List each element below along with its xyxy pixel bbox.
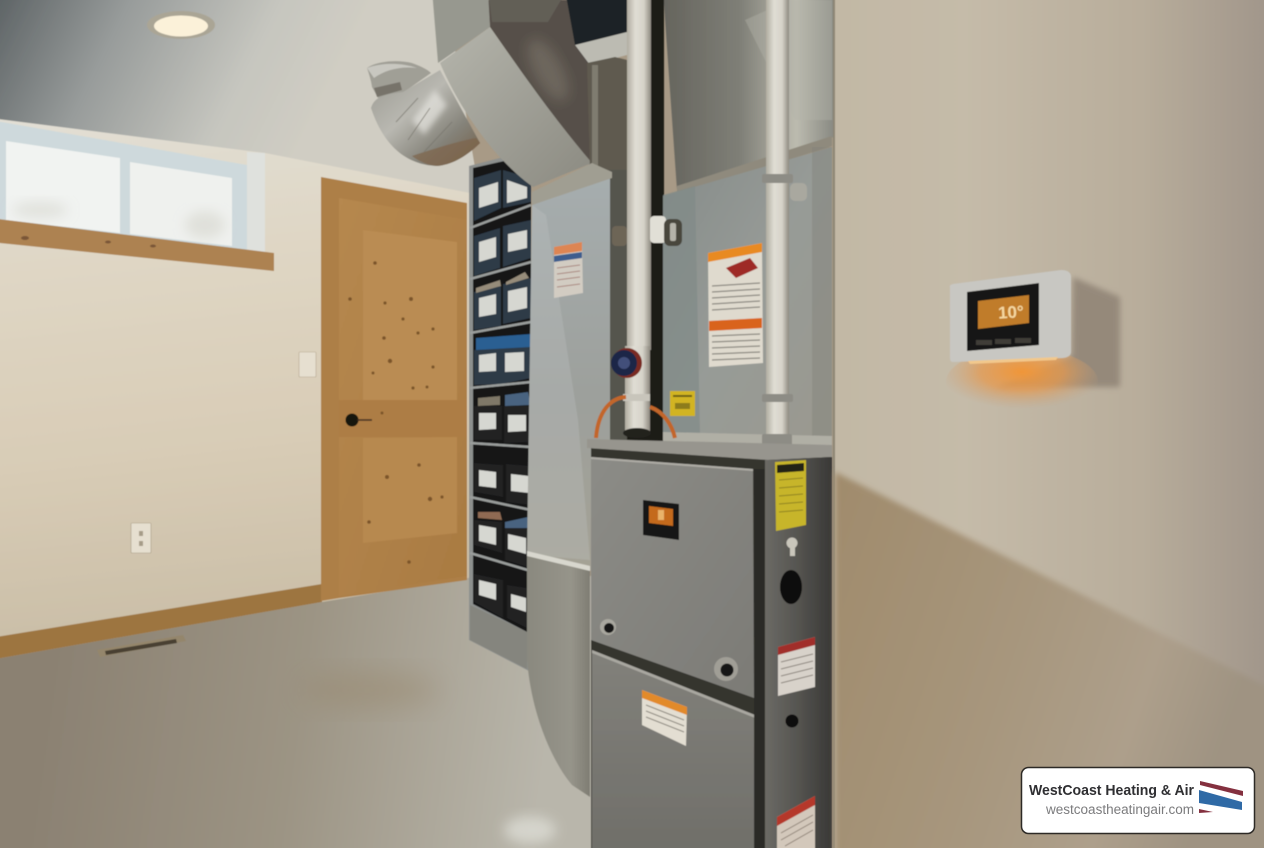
large ductwork plenum (432, 0, 834, 196)
bins (474, 170, 531, 628)
large side hole (780, 570, 802, 604)
side keyhole tag (786, 538, 798, 556)
website: westcoastheatingair.com (1045, 802, 1194, 817)
storage shelves with labelled bins (469, 150, 531, 672)
small side hole (786, 714, 798, 728)
floor vent (97, 635, 186, 657)
bin labels (479, 180, 529, 612)
gas valve (611, 348, 642, 378)
pipe base collar (623, 428, 651, 438)
light switch (299, 352, 316, 377)
right wall (833, 0, 1264, 848)
wood baseboard (0, 584, 322, 660)
furnace air handler right cabinet (663, 147, 832, 447)
pipe clamps (762, 174, 793, 446)
lower duct section (527, 555, 590, 797)
floor (0, 576, 640, 848)
furnace air handler left cabinet (527, 163, 612, 797)
dark opening (565, 0, 627, 65)
wooden window sill (0, 218, 274, 271)
wooden door (321, 177, 467, 601)
thermostat temperature: 10° (998, 302, 1024, 323)
door knob (346, 414, 372, 426)
lower access door (592, 650, 755, 848)
ceiling recessed light (147, 11, 215, 39)
white side sticker (778, 637, 815, 696)
thermostat shadow and glow (946, 277, 1120, 416)
left wall (0, 118, 480, 660)
door hole left (600, 619, 616, 635)
door knots (348, 261, 444, 564)
left cabinet shoulder (587, 57, 627, 178)
curved elbow face (440, 27, 592, 187)
thermostat buttons (976, 338, 1031, 345)
dark column between cabinets (608, 0, 664, 450)
left white vent pipe (623, 0, 651, 434)
round flexible duct (367, 61, 480, 166)
yellow side sticker (775, 460, 806, 531)
door side shadow (754, 469, 765, 848)
pipe connector (612, 216, 682, 246)
company name: WestCoast Heating & Air (1029, 783, 1194, 799)
safety sticker (554, 242, 583, 298)
blue and tan bin contents (476, 272, 531, 528)
seam band (532, 163, 612, 205)
orange gas hose (596, 397, 675, 438)
yellow tag (670, 391, 695, 416)
lower side sticker (777, 796, 815, 848)
door hole right (714, 657, 738, 681)
top plate (587, 439, 832, 460)
gas furnace unit (587, 439, 832, 848)
wall thermostat (950, 270, 1071, 364)
flag icon (1199, 781, 1243, 813)
dark inner elbow (488, 0, 592, 168)
warning sticker (708, 243, 763, 367)
shelf boards (470, 205, 531, 571)
orange warning sticker (642, 690, 687, 746)
right white vent pipe (762, 0, 807, 446)
upper elbow panel (432, 0, 490, 63)
side panel (765, 457, 832, 848)
upper access door (591, 457, 754, 698)
door digital display (643, 500, 679, 540)
thermostat screen (967, 283, 1039, 351)
right upper duct (663, 0, 834, 190)
company logo badge (1022, 768, 1254, 834)
ceiling (0, 0, 480, 197)
basement window (0, 120, 265, 255)
wall outlet (131, 523, 151, 553)
side bracket (790, 183, 807, 201)
